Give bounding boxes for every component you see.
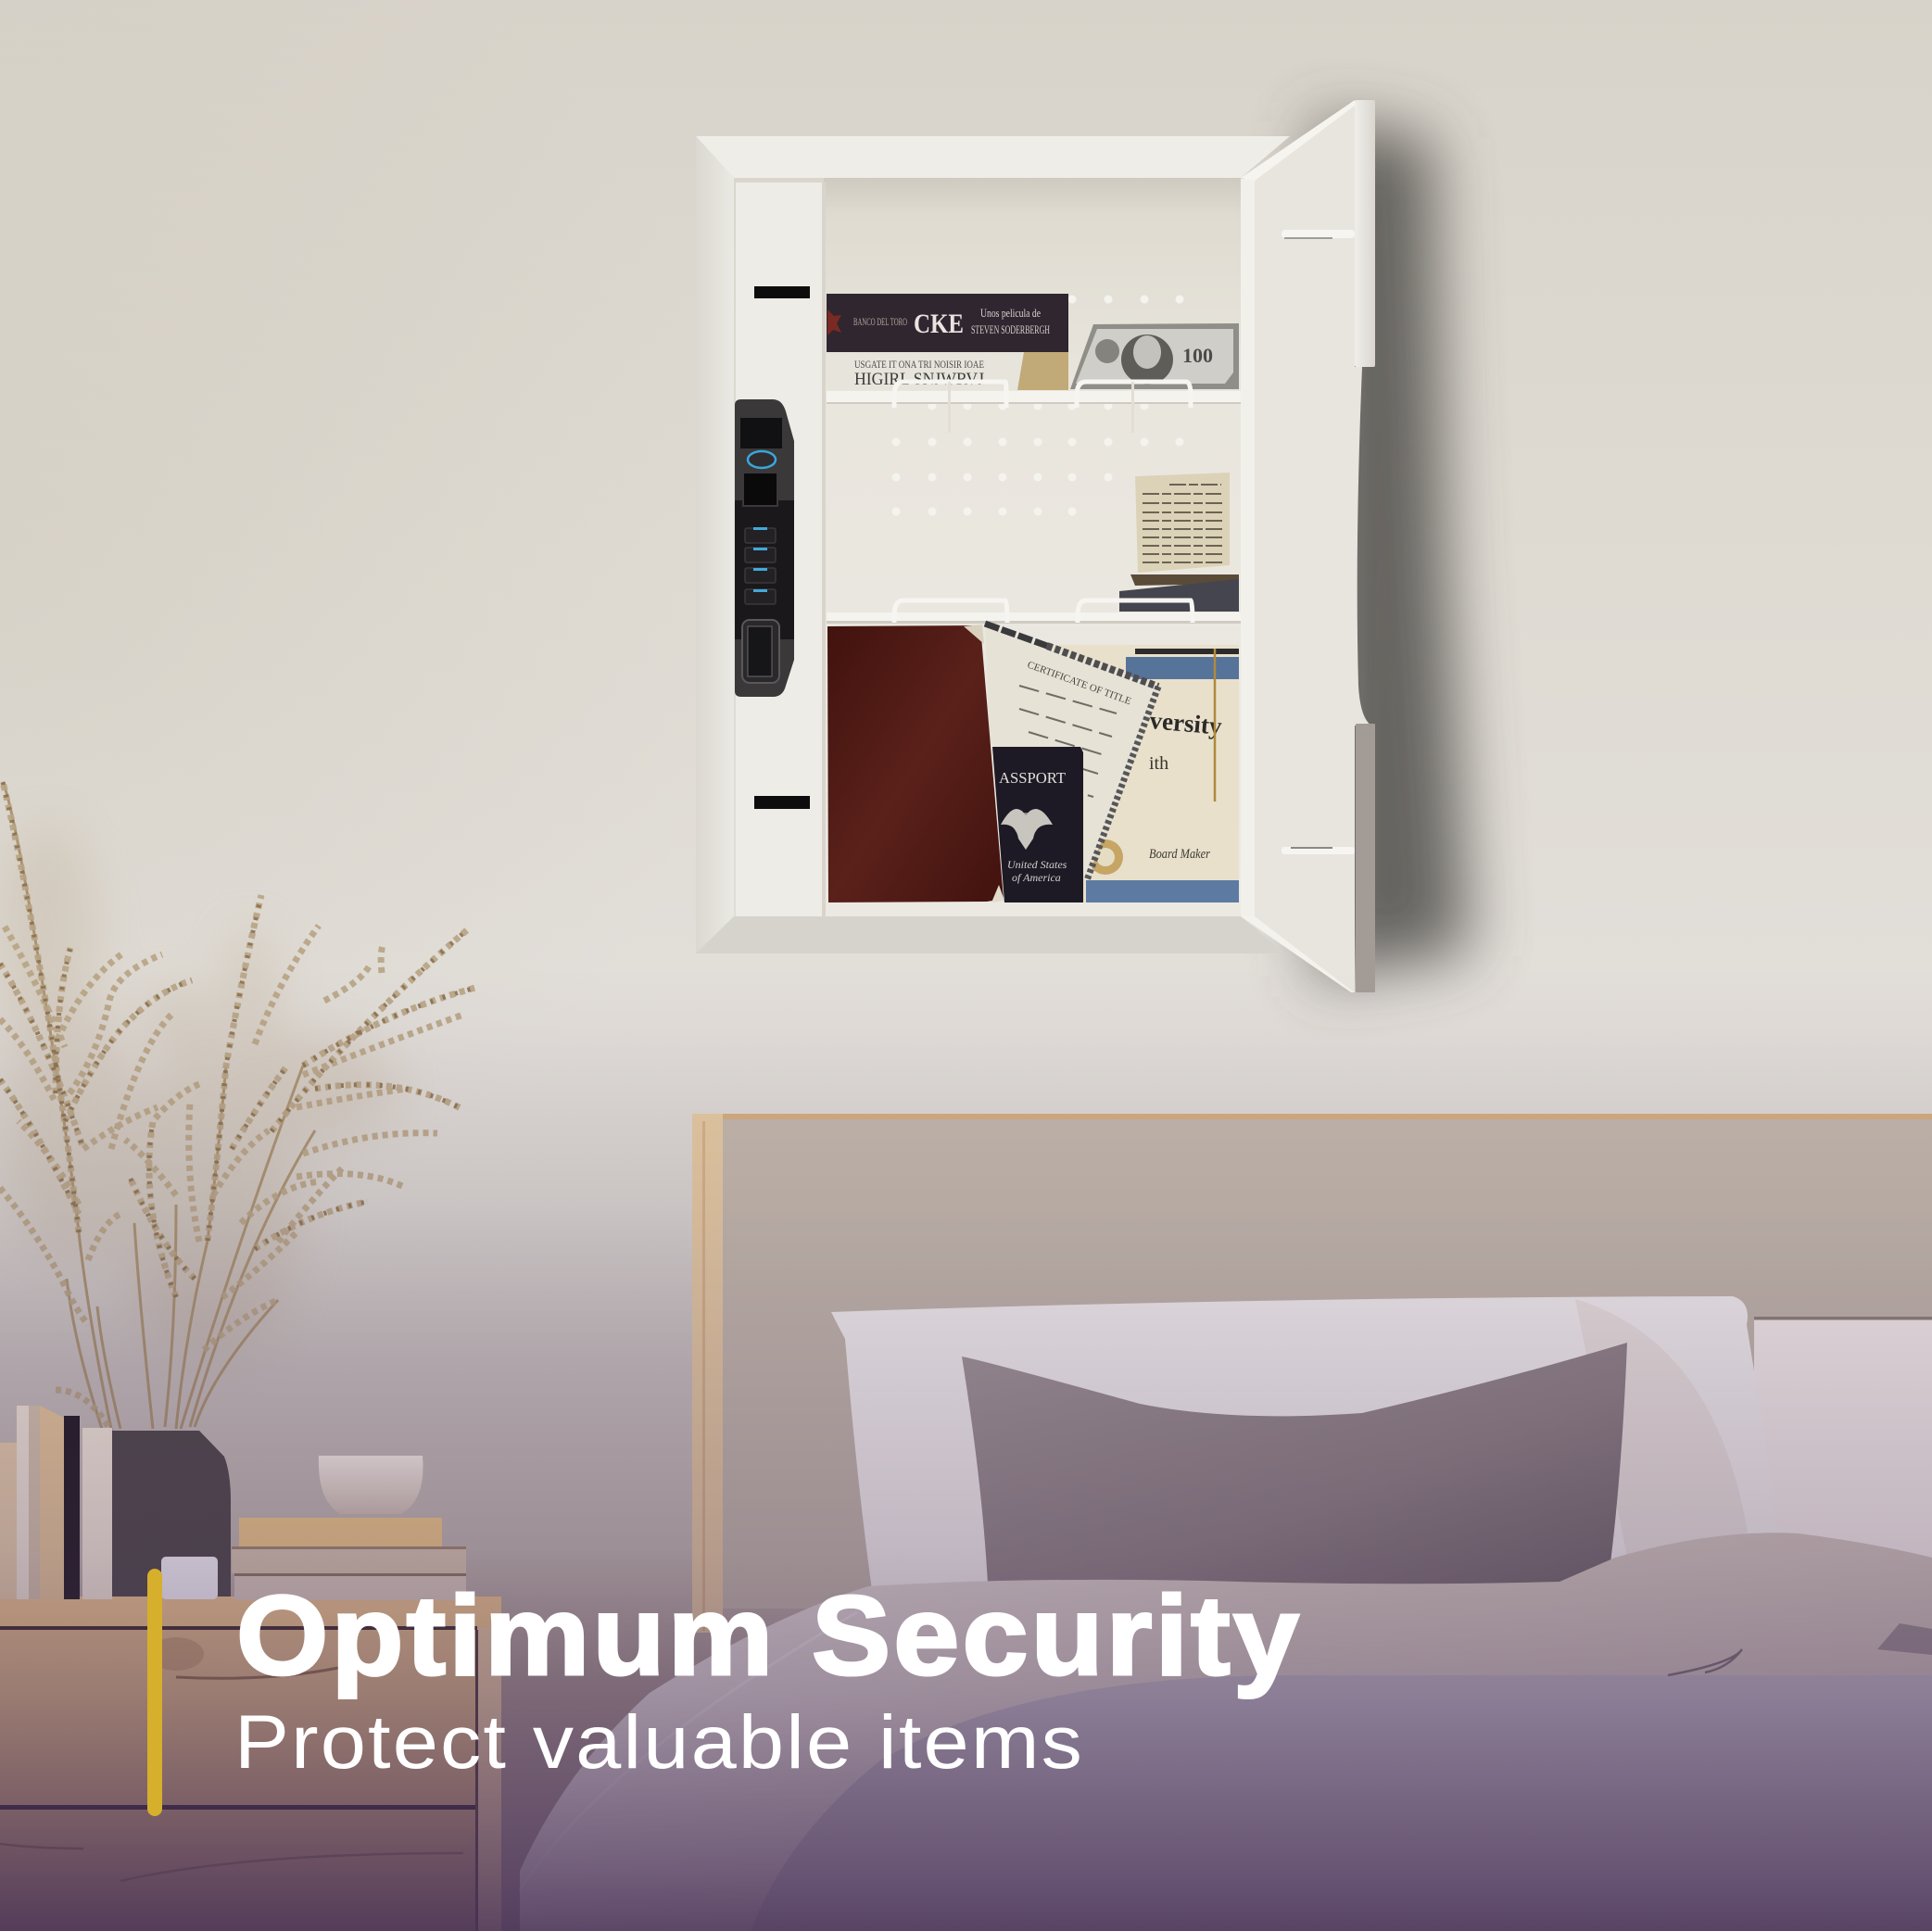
university diploma: ith	[1149, 753, 1168, 774]
door edge: lower	[1356, 724, 1375, 992]
passport: ASSPORT	[999, 769, 1067, 787]
yellow accent bar	[147, 1569, 162, 1816]
safe interior	[824, 178, 1241, 916]
bed headboard	[692, 1114, 1932, 1633]
icon: fingerprint ring	[748, 451, 776, 468]
plant branches with dappled seed heads	[0, 782, 479, 1432]
duvet and blanket	[520, 1533, 1932, 1931]
book: white paperback	[827, 355, 1017, 390]
banknotes	[1070, 323, 1239, 389]
bottom shelf documents	[827, 624, 1239, 902]
white pillow	[831, 1296, 1787, 1590]
book: dark hardcover: CKE	[914, 309, 964, 339]
keypad LEDs	[753, 527, 767, 592]
upper shelf contents	[827, 294, 1239, 390]
door edge: upper	[1355, 100, 1375, 367]
passport: of America	[1012, 871, 1061, 884]
nightstand dresser	[0, 1597, 501, 1931]
wall safe	[696, 100, 1375, 992]
printed notice	[1135, 473, 1230, 573]
icon: eagle seal	[1001, 809, 1053, 850]
dried pampas plant	[0, 782, 479, 1432]
title: Optimum Security	[236, 1572, 1302, 1698]
red leather folder	[827, 625, 1004, 902]
passport: United States	[1007, 858, 1067, 871]
passport	[992, 747, 1083, 902]
left lock panel	[736, 183, 826, 916]
book: dark hardcover: Unos pelicula de	[980, 306, 1041, 320]
university diploma	[1029, 645, 1239, 902]
plant stems	[3, 782, 315, 1429]
university diploma: Board Maker	[1149, 847, 1210, 862]
banknotes: 100	[1182, 344, 1213, 367]
open safe door	[1241, 100, 1375, 992]
electronic keypad lock	[735, 399, 794, 697]
stacked dark items	[1119, 574, 1239, 612]
gray accent pillow	[962, 1343, 1627, 1584]
university diploma: versity	[1148, 706, 1223, 740]
safe frame	[696, 136, 1290, 953]
door shadow on wall	[1316, 120, 1469, 978]
ceramic bowl	[319, 1456, 423, 1514]
certificate of title	[985, 624, 1158, 880]
book: white paperback: HIGIRL SNJWRVJ	[854, 370, 984, 389]
books on dresser	[0, 1406, 112, 1599]
shelf two	[827, 600, 1241, 624]
book: dark hardcover	[827, 294, 1068, 352]
certificate of title: CERTIFICATE OF TITLE	[1026, 660, 1133, 707]
peg holes	[891, 295, 1184, 515]
book: dark hardcover: STEVEN SODERBERGH	[971, 322, 1050, 336]
book: dark hardcover: BANCO DEL TORO	[853, 315, 907, 328]
middle shelf contents	[1119, 473, 1239, 612]
book: white paperback: USGATE IT ONA TRI NOISIR IOAE	[854, 358, 984, 371]
door bolt slots	[1282, 230, 1355, 854]
ceramic vase	[112, 1431, 231, 1597]
small white candle	[161, 1557, 218, 1599]
gold bar	[1017, 352, 1068, 390]
plant foliage haze	[0, 825, 398, 1362]
subtitle: Protect valuable items	[234, 1700, 1084, 1785]
shelf one	[827, 382, 1241, 433]
stacked books	[232, 1518, 466, 1600]
